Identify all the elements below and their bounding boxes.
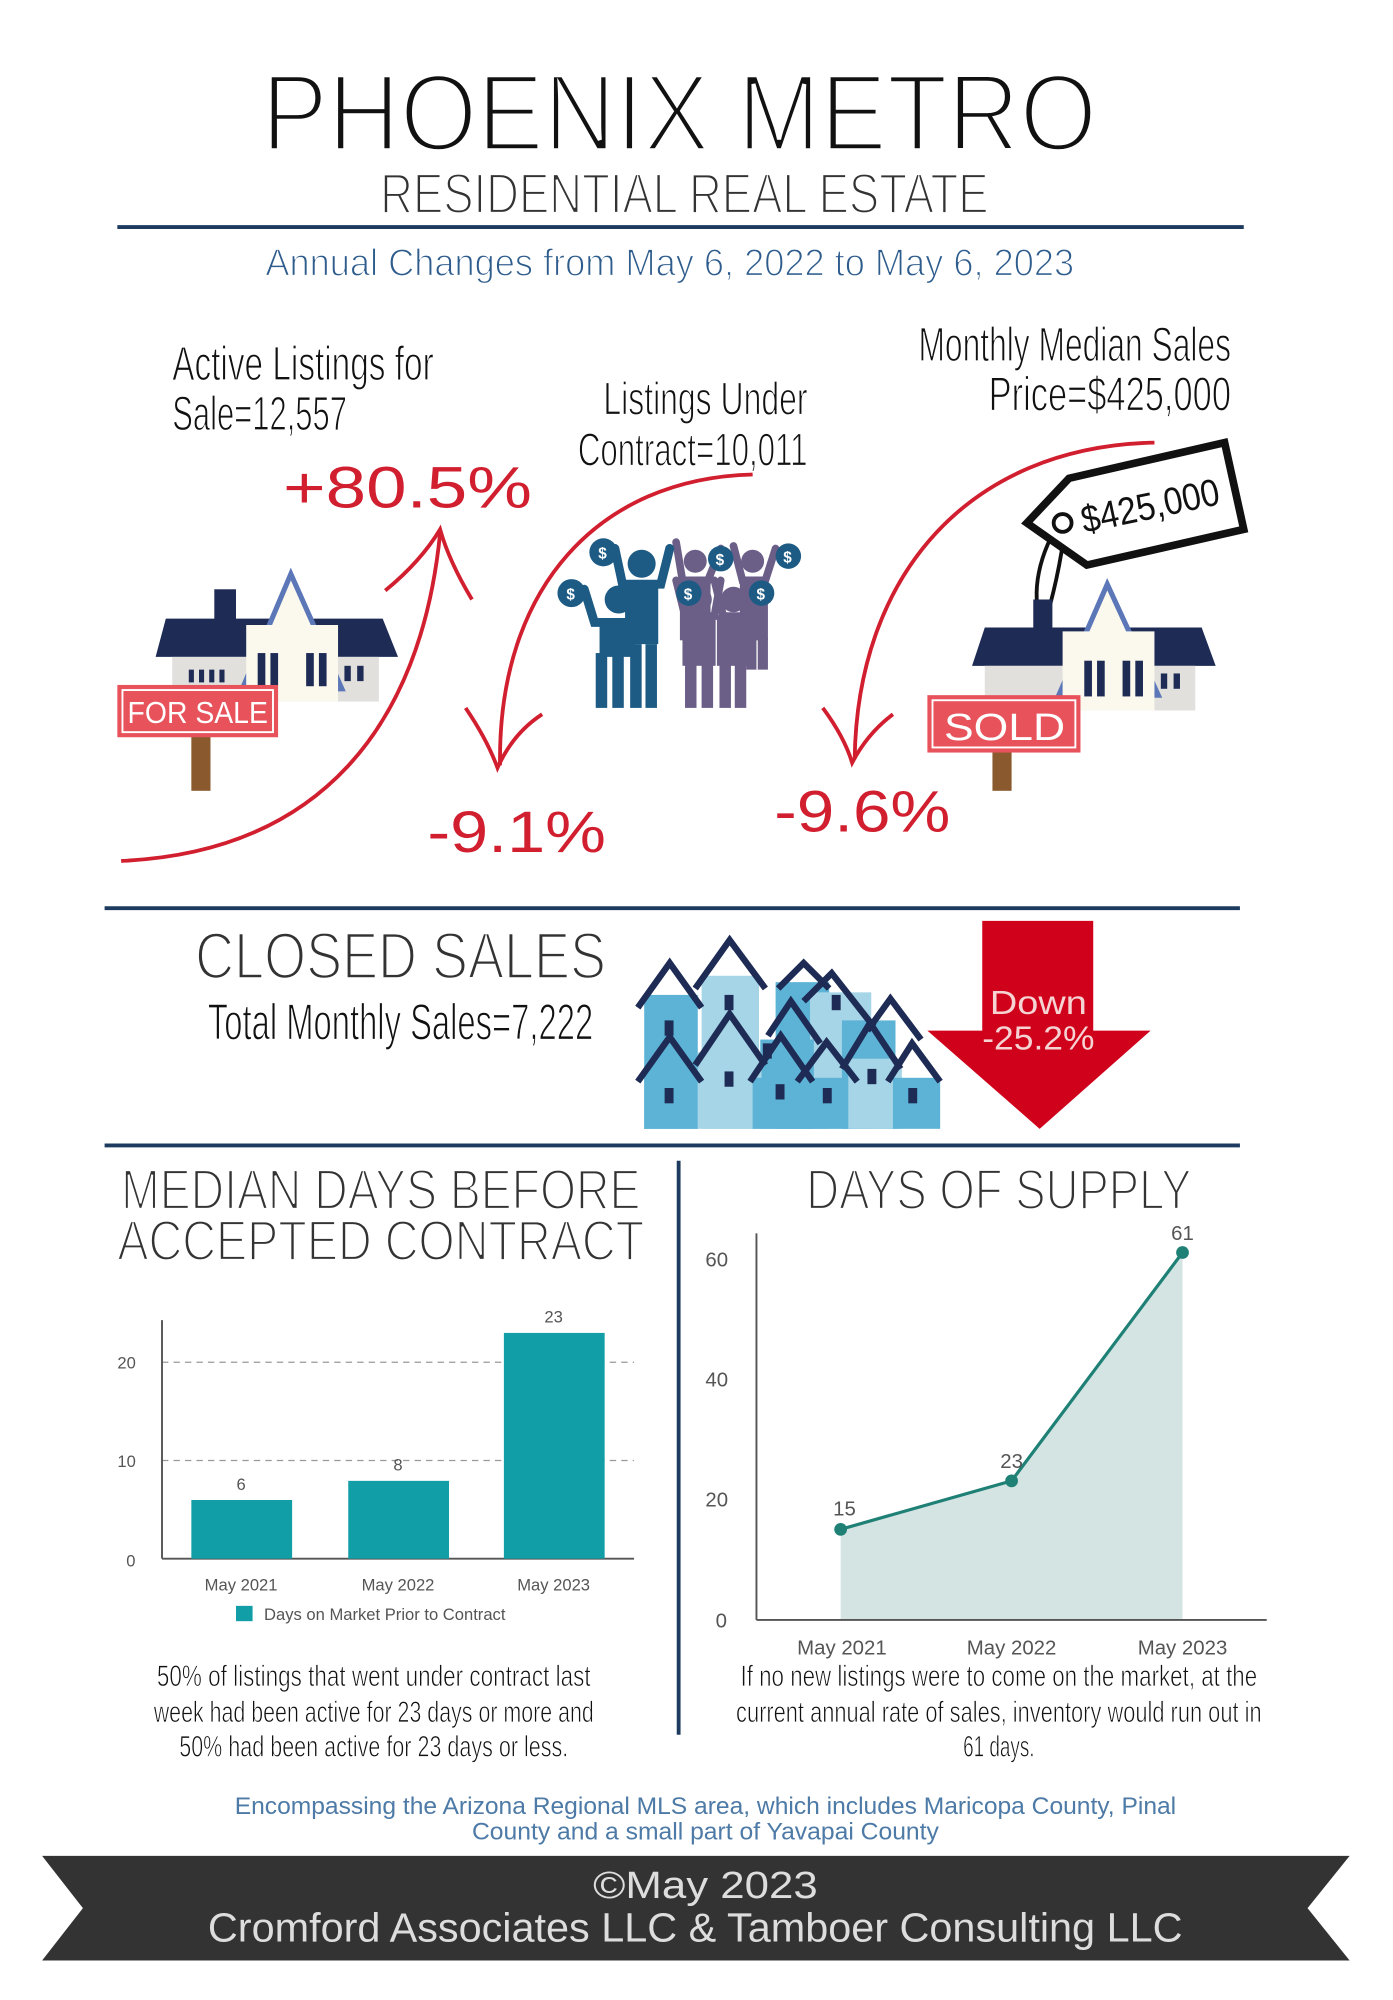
heading: median days — [117, 1158, 644, 1272]
active listings label: Active Listings for — [172, 337, 434, 391]
icon: price tag: $425,000 — [1077, 471, 1223, 542]
line chart: 61 — [1171, 1223, 1194, 1245]
line chart: May 2023 — [1138, 1637, 1227, 1659]
line chart: 40 — [705, 1369, 728, 1391]
title: PHOENIX METRO — [262, 53, 1097, 175]
note: median days — [153, 1660, 594, 1763]
note: days of supply: 61 days. — [963, 1730, 1035, 1763]
arrow: down -25.2% — [927, 921, 1151, 1129]
bar chart: 20 — [117, 1354, 136, 1373]
line chart — [705, 1223, 1267, 1659]
banner: credits: Cromford Associates LLC & Tamboer Consulting LLC — [208, 1904, 1183, 1950]
line chart: 15 — [833, 1498, 856, 1520]
median price label: Price=$425,000 — [989, 368, 1231, 422]
icon: sold house: SOLD — [944, 706, 1065, 749]
stat: -9.6%: -9.6% — [774, 780, 950, 845]
panel: listings under contract — [466, 373, 807, 768]
icon: people with money bags: $ — [783, 550, 792, 566]
icon: people with money bags: $ — [684, 586, 693, 603]
icon: people with money bags: $ — [756, 586, 765, 603]
note: median days: 50% had been active for 23 days or less. — [179, 1730, 568, 1763]
median price label — [918, 318, 1231, 422]
under contract label: Listings Under — [603, 373, 807, 425]
footer note: Encompassing the Arizona Regional MLS area, which includes Maricopa County, Pinal — [235, 1793, 1176, 1820]
total monthly sales: Total Monthly Sales=7,222 — [208, 994, 593, 1051]
line chart: 0 — [716, 1611, 727, 1633]
under contract label: Contract=10,011 — [578, 424, 807, 476]
line chart: 60 — [705, 1250, 728, 1272]
under contract label — [578, 373, 807, 476]
heading: days of supply: DAYS OF SUPPLY — [806, 1158, 1191, 1221]
arrow: down curve right — [823, 443, 1154, 763]
stat: +80.5%: +80.5% — [283, 456, 532, 521]
icon: price tag — [1027, 443, 1244, 628]
panel: median days before accepted contract — [117, 1158, 644, 1763]
banner: credits: ©May 2023 — [593, 1864, 818, 1907]
active listings label — [172, 337, 434, 441]
icon: for sale house: FOR SALE — [128, 696, 268, 730]
heading: median days: MEDIAN DAYS BEFORE — [121, 1158, 640, 1221]
bar chart: 10 — [117, 1452, 136, 1471]
arrow: down -25.2%: -25.2% — [982, 1021, 1094, 1058]
note: median days: 50% of listings that went under contract last — [157, 1660, 591, 1693]
footer note: County and a small part of Yavapai County — [472, 1818, 940, 1845]
subtitle: RESIDENTIAL REAL ESTATE — [380, 162, 989, 225]
closed sales heading: CLOSED SALES — [195, 919, 606, 993]
bar chart: 23 — [544, 1308, 563, 1327]
median price label: Monthly Median Sales — [918, 318, 1231, 372]
note: median days: week had been active for 23 days or more and — [153, 1696, 594, 1729]
icon: people with money bags — [557, 538, 801, 708]
line chart: 20 — [705, 1489, 728, 1511]
panel: days of supply — [705, 1158, 1267, 1763]
note: days of supply — [736, 1660, 1262, 1763]
banner: credits — [42, 1856, 1350, 1960]
icon: people with money bags: $ — [566, 586, 575, 603]
active listings label: Sale=12,557 — [172, 387, 347, 441]
bar chart — [117, 1308, 634, 1624]
arrow: down curve — [466, 474, 753, 768]
icon: house cluster — [638, 940, 940, 1129]
line chart: May 2021 — [797, 1637, 887, 1659]
panel: median sales price — [823, 318, 1244, 791]
icon: sold house — [927, 584, 1216, 791]
date range heading: Annual Changes from May 6, 2022 to May 6, 2023 — [265, 242, 1074, 285]
stat: -9.1%: -9.1% — [427, 800, 606, 865]
panel: closed sales — [195, 919, 1151, 1129]
line chart: May 2022 — [967, 1637, 1056, 1659]
heading: median days: ACCEPTED CONTRACT — [117, 1209, 644, 1272]
line chart: 23 — [1000, 1451, 1023, 1473]
icon: people with money bags: $ — [716, 552, 725, 569]
bar chart: Days on Market Prior to Contract — [264, 1605, 506, 1624]
icon: people with money bags: $ — [598, 546, 607, 563]
bar chart: May 2021 — [205, 1576, 278, 1595]
arrow: up curve — [121, 529, 472, 861]
footer note — [235, 1793, 1176, 1845]
bar chart: 6 — [236, 1475, 246, 1494]
panel: active listings — [117, 337, 532, 861]
arrow: down -25.2%: Down — [990, 985, 1087, 1022]
bar chart: 0 — [126, 1551, 136, 1570]
bar chart: 8 — [393, 1456, 403, 1475]
bar chart: May 2022 — [362, 1576, 434, 1595]
icon: for sale house — [117, 574, 398, 791]
bar chart: May 2023 — [517, 1576, 590, 1595]
